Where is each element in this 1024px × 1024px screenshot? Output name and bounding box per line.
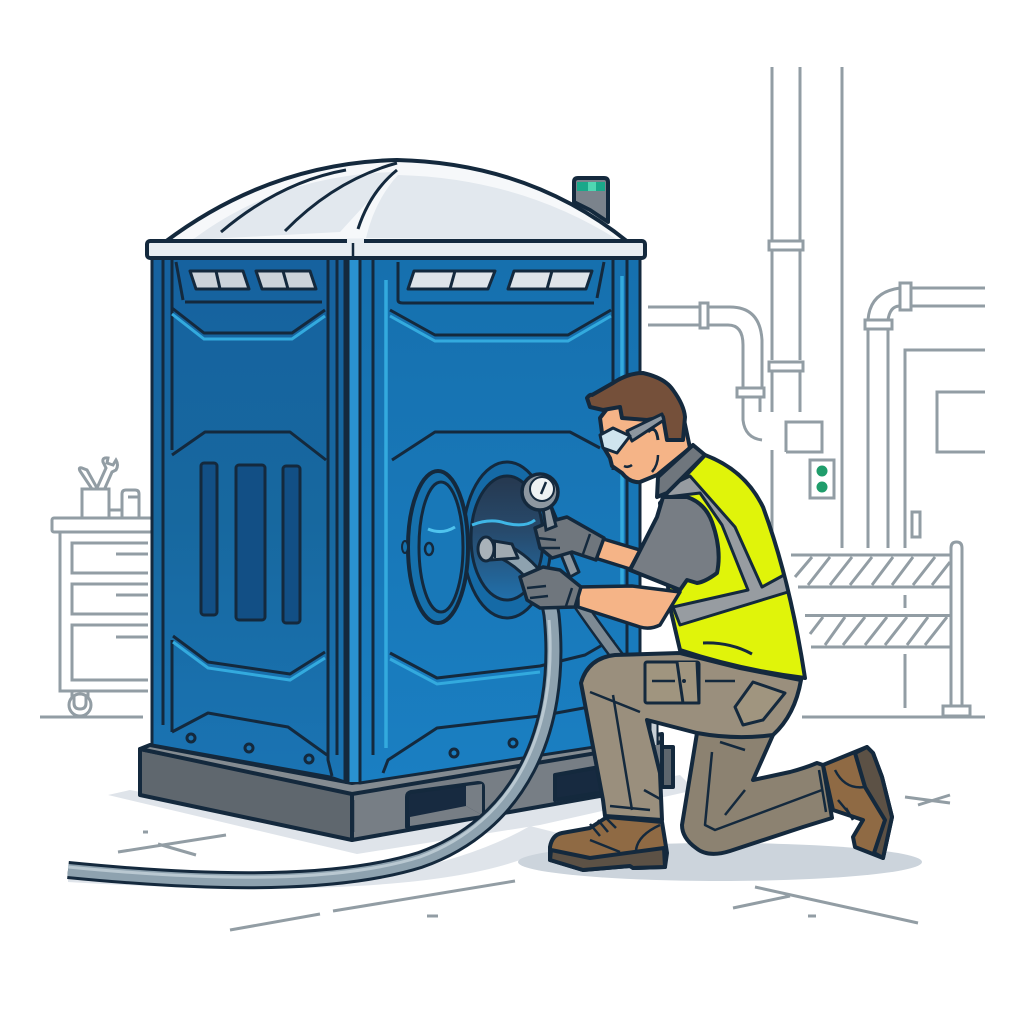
panel embossing right <box>383 262 611 773</box>
left panel <box>152 258 345 782</box>
corner ribs and edge lines <box>163 258 627 782</box>
roof eave <box>147 241 645 258</box>
safety goggles <box>600 414 664 472</box>
shirt sleeve <box>630 497 719 590</box>
rear glove <box>535 517 604 560</box>
vents right <box>408 271 592 289</box>
panel embossing left <box>172 262 327 763</box>
rear boot <box>823 747 892 858</box>
rear leg trousers <box>682 733 832 854</box>
floor shadows <box>68 775 922 888</box>
front leg and thigh trousers <box>581 653 826 830</box>
background: pipes and wall line art <box>648 67 985 708</box>
portable toilet <box>140 160 673 840</box>
hose nozzle <box>478 537 518 561</box>
hose <box>68 552 654 880</box>
hair <box>587 373 685 440</box>
gauge handle <box>543 508 579 577</box>
vents left <box>190 271 316 289</box>
head and face <box>600 400 690 482</box>
base pallet <box>140 734 673 840</box>
corner stripe <box>349 258 359 782</box>
front forearm <box>578 586 680 628</box>
tank opening <box>463 462 551 618</box>
worker <box>520 373 892 870</box>
pressure gauge <box>522 474 558 530</box>
icon: green status switch box <box>810 460 834 498</box>
hatch door <box>402 471 468 623</box>
right panel <box>345 258 640 783</box>
roof vent with green light <box>574 178 608 222</box>
rear forearm <box>595 538 640 569</box>
hi-vis vest <box>660 455 805 678</box>
front glove <box>520 567 581 608</box>
collar <box>657 445 705 497</box>
barrier <box>791 542 985 717</box>
front boot <box>550 817 667 870</box>
tool cart <box>40 458 152 717</box>
roof dome <box>165 160 628 242</box>
floor crack lines <box>118 795 950 930</box>
roof ridges <box>221 163 397 232</box>
roof shading <box>190 172 618 240</box>
